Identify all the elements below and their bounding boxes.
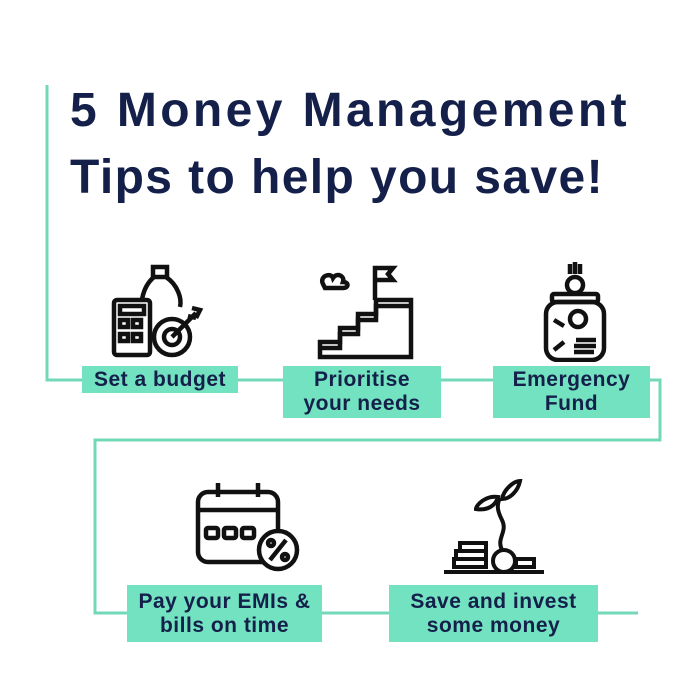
text: 5 Money Management [70, 84, 630, 137]
box: Save and invest: some money [427, 614, 560, 636]
box: Save and invest: Save and invest [410, 590, 577, 612]
text: Tips to help you save! [70, 151, 604, 204]
icon: jar with coins [544, 262, 606, 362]
box: Pay your EMIs: bills on time [160, 614, 289, 636]
icon: calendar with percent [196, 483, 300, 572]
box: Pay your EMIs: Pay your EMIs & [138, 590, 311, 612]
box: Set a budget: Set a budget [94, 368, 226, 390]
box: Prioritise your needs [283, 366, 441, 418]
box: Prioritise your needs: Prioritise [314, 368, 410, 391]
icon: calculator money bag target [112, 264, 204, 358]
box: Emergency Fund: Emergency [513, 368, 630, 391]
box: Pay your EMIs [127, 585, 322, 642]
box: Save and invest [389, 585, 598, 642]
icon: stairs with flag [318, 266, 414, 360]
title [70, 84, 630, 204]
box: Prioritise your needs: your needs [303, 392, 421, 415]
box: Emergency Fund: Fund [545, 392, 598, 415]
box: Emergency Fund [493, 366, 650, 418]
icon: plant with coins [444, 479, 544, 574]
